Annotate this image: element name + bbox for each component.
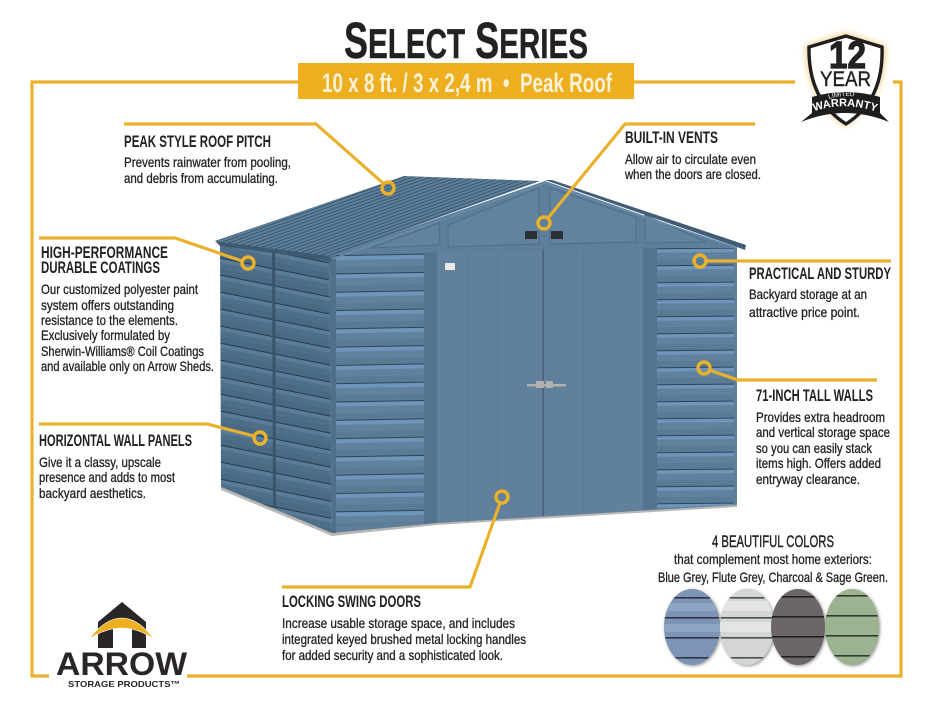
callout: peak roof: Prevents rainwater from pooling, <box>124 154 291 170</box>
colors text: 4 BEAUTIFUL COLORS <box>712 532 834 551</box>
badge year: YEAR <box>820 68 871 91</box>
colors text: that complement most home exteriors: <box>674 551 872 567</box>
pilasters <box>424 248 657 524</box>
warranty badge <box>801 29 890 130</box>
colors text <box>658 532 888 585</box>
swatch shadows <box>665 590 880 666</box>
shield <box>809 36 882 124</box>
shed left side wall <box>220 245 332 533</box>
callout: horizontal wall panels: HORIZONTAL WALL PANELS <box>39 431 192 450</box>
callout: horizontal wall panels <box>39 424 266 501</box>
corner post <box>329 255 336 533</box>
callout: 71-inch walls: items high. Offers added <box>756 455 881 471</box>
color swatches <box>660 585 882 669</box>
badge number: 12 <box>829 35 866 77</box>
callout: practical and sturdy: attractive price point. <box>749 304 860 320</box>
callout: 71-inch walls: 71-INCH TALL WALLS <box>756 386 873 405</box>
arrow logo <box>56 602 188 689</box>
callout: 71-inch walls: entryway clearance. <box>756 471 860 487</box>
callout: built-in vents: when the doors are closed. <box>624 166 761 182</box>
logo wordmark: ARROW <box>56 646 188 682</box>
roof left slope <box>215 176 540 257</box>
door label <box>445 263 455 270</box>
callout: practical and sturdy <box>694 255 891 320</box>
callout: locking swing doors: for added security and a sophisticated look. <box>282 647 503 663</box>
callout: coatings: DURABLE COATINGS <box>41 258 160 277</box>
callout: 71-inch walls: Provides extra headroom <box>756 409 885 425</box>
vents <box>525 231 563 239</box>
title: SELECT SERIES <box>344 12 588 69</box>
callout: coatings: Exclusively formulated by <box>41 327 170 343</box>
swatch: sage green <box>825 589 879 665</box>
callout: coatings: and available only on Arrow Sheds. <box>41 358 214 374</box>
subtitle banner: 10 x 8 ft. / 3 x 2,4 m • Peak Roof <box>322 68 613 98</box>
callout: peak roof: and debris from accumulating. <box>124 170 278 186</box>
frame border <box>32 82 901 676</box>
left front louvers <box>336 253 424 527</box>
callout: peak roof: PEAK STYLE ROOF PITCH <box>124 132 271 151</box>
callout: built-in vents <box>538 124 761 229</box>
callout: built-in vents: BUILT-IN VENTS <box>625 128 718 147</box>
swatch: blue grey <box>664 589 720 665</box>
callout: 71-inch walls: so you can easily stack <box>756 440 873 456</box>
gable panels <box>371 188 707 248</box>
shed front wall <box>329 181 737 533</box>
swatch: charcoal <box>771 589 825 665</box>
callout: locking swing doors: Increase usable storage space, and includes <box>282 615 515 631</box>
warranty badge: WARRANTY <box>812 98 878 111</box>
roof right slope and fascia <box>545 180 746 250</box>
callout: horizontal wall panels: backyard aesthetics. <box>39 485 146 501</box>
callout: peak roof <box>124 124 394 194</box>
callout: coatings: HIGH-PERFORMANCE <box>41 243 168 262</box>
logo swoosh <box>89 618 154 639</box>
callout: coatings: resistance to the elements. <box>41 312 178 328</box>
callout: coatings: Our customized polyester paint <box>41 281 198 297</box>
double doors <box>437 248 643 523</box>
callout: locking swing doors: LOCKING SWING DOORS <box>282 592 421 611</box>
shed ground base <box>221 487 737 536</box>
logo tagline: STORAGE PRODUCTS™ <box>68 679 180 689</box>
callout: locking swing doors: integrated keyed brushed metal locking handles <box>282 631 526 647</box>
callout: locking swing doors <box>282 491 526 663</box>
callout: coatings: system offers outstanding <box>41 297 174 313</box>
callout: coatings: Sherwin-Williams® Coil Coatings <box>41 343 204 359</box>
logo house <box>98 602 146 648</box>
roof left edge <box>215 241 332 261</box>
right front louvers <box>657 248 734 508</box>
badge glow <box>805 32 886 127</box>
swatch: flute grey <box>720 589 772 665</box>
callout: 71-inch walls <box>698 362 890 487</box>
callout: coatings <box>39 238 254 374</box>
callout: horizontal wall panels: presence and adds to most <box>39 469 175 485</box>
callout: built-in vents: Allow air to circulate even <box>625 151 756 167</box>
ribbon text: LIMITED <box>828 92 854 99</box>
callout: 71-inch walls: and vertical storage space <box>756 424 890 440</box>
subtitle banner <box>298 63 634 99</box>
callout: horizontal wall panels: Give it a classy, upscale <box>39 454 161 470</box>
shed illustration <box>215 176 746 536</box>
callout: practical and sturdy: Backyard storage at an <box>749 286 867 302</box>
gable trim <box>332 183 737 259</box>
side seam <box>272 250 276 507</box>
door handle <box>527 381 566 388</box>
badge ribbon <box>801 92 889 122</box>
